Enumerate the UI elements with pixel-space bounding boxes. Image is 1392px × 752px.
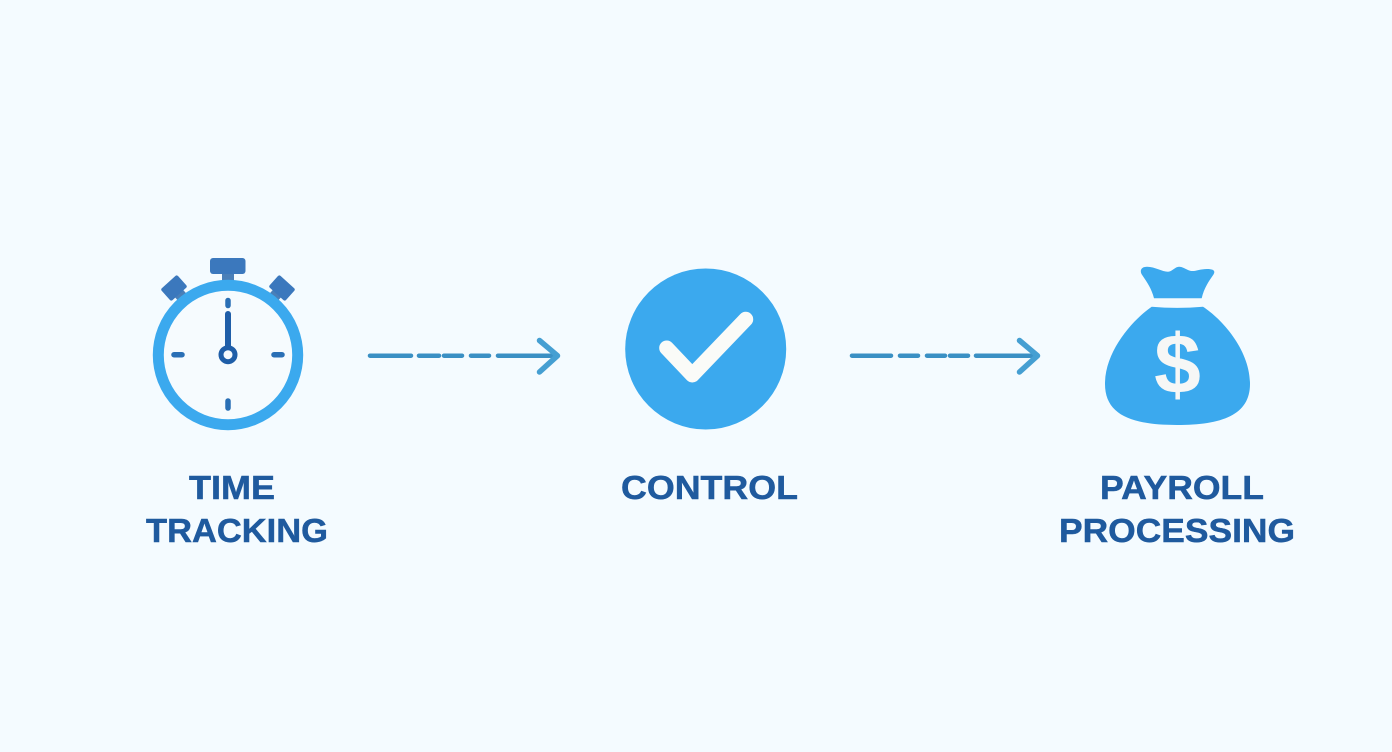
stopwatch top button bbox=[210, 258, 246, 283]
arrow: control to payroll processing bbox=[852, 340, 1038, 372]
stopwatch hand bbox=[225, 314, 231, 346]
money bag knot bbox=[1141, 267, 1214, 298]
label: control: CONTROL bbox=[621, 469, 798, 506]
stopwatch right button bbox=[263, 275, 296, 307]
label: time tracking bbox=[146, 469, 328, 549]
dollar sign: $ bbox=[1154, 317, 1201, 411]
label: payroll processing: PROCESSING bbox=[1059, 512, 1295, 549]
icon: money bag bbox=[1105, 267, 1250, 425]
arrow: time tracking to control bbox=[370, 340, 558, 372]
stopwatch centre pin bbox=[221, 348, 235, 362]
icon: check mark circle bbox=[625, 268, 786, 430]
label: time tracking: TRACKING bbox=[146, 512, 328, 549]
label: payroll processing bbox=[1059, 469, 1295, 549]
icon: stopwatch bbox=[158, 258, 298, 425]
stopwatch ring bbox=[158, 285, 298, 425]
label: payroll processing: PAYROLL bbox=[1100, 469, 1264, 506]
label: time tracking: TIME bbox=[189, 469, 275, 506]
stopwatch tick marks bbox=[174, 300, 282, 408]
money bag body bbox=[1105, 307, 1250, 425]
stopwatch left button bbox=[160, 275, 193, 307]
